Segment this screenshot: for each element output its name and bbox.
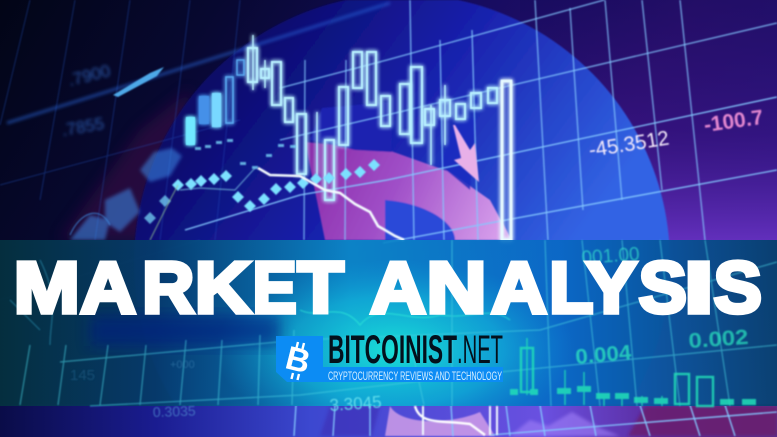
title: R bbox=[142, 249, 194, 329]
title: N bbox=[426, 249, 486, 329]
perspective grid bbox=[185, 0, 777, 436]
blurred axis values: .7855 bbox=[60, 114, 106, 140]
band values: 145 bbox=[70, 367, 95, 384]
candlestick chart bbox=[186, 35, 511, 240]
title bbox=[14, 249, 762, 329]
title: S bbox=[714, 249, 762, 329]
title: T bbox=[298, 249, 344, 329]
band chart details bbox=[10, 240, 777, 406]
title: E bbox=[253, 249, 297, 329]
band values: +000 bbox=[170, 359, 195, 371]
band values: 0.004 bbox=[574, 341, 633, 369]
pink bitcoin symbol bbox=[305, 102, 512, 240]
bitcoin disc bbox=[134, 0, 670, 437]
blurred axis values bbox=[60, 61, 112, 140]
title: A bbox=[370, 249, 426, 329]
title: L bbox=[549, 249, 593, 329]
band values: 0.3035 bbox=[153, 403, 196, 420]
logo wordmark: BITCOINIST bbox=[328, 328, 457, 372]
chart values bbox=[587, 106, 765, 162]
lower trend line bbox=[415, 406, 497, 435]
long diagonal line bbox=[7, 3, 390, 123]
translucent band bbox=[0, 240, 777, 406]
band values: 3.3045 bbox=[329, 392, 382, 415]
title: A bbox=[491, 249, 547, 329]
logo badge bbox=[276, 336, 323, 382]
logo wordmark: .NET bbox=[457, 328, 503, 372]
title: K bbox=[195, 249, 251, 329]
diamond markers bbox=[70, 139, 380, 240]
band values bbox=[70, 244, 749, 420]
title: I bbox=[684, 249, 714, 329]
title: Y bbox=[586, 249, 637, 329]
logo badge: B bbox=[282, 339, 314, 380]
title: M bbox=[14, 249, 80, 329]
title: A bbox=[80, 249, 136, 329]
white trend line bbox=[70, 168, 404, 240]
title: S bbox=[639, 249, 687, 329]
logo tagline bbox=[323, 367, 503, 383]
blurred axis values: .7900 bbox=[66, 61, 112, 90]
chart values: -45.3512 bbox=[587, 127, 671, 162]
arrows bbox=[113, 67, 479, 182]
bitcoinist logo bbox=[276, 328, 503, 383]
logo tagline: CRYPTOCURRENCY REVIEWS AND TECHNOLOGY bbox=[328, 369, 502, 383]
band candles bbox=[510, 338, 756, 406]
faint left grid bbox=[0, 0, 240, 300]
band values: 0.002 bbox=[688, 326, 749, 353]
chart values: -100.7 bbox=[702, 106, 765, 137]
band values: 001.00 bbox=[581, 244, 640, 269]
bottom strip bbox=[0, 404, 777, 437]
